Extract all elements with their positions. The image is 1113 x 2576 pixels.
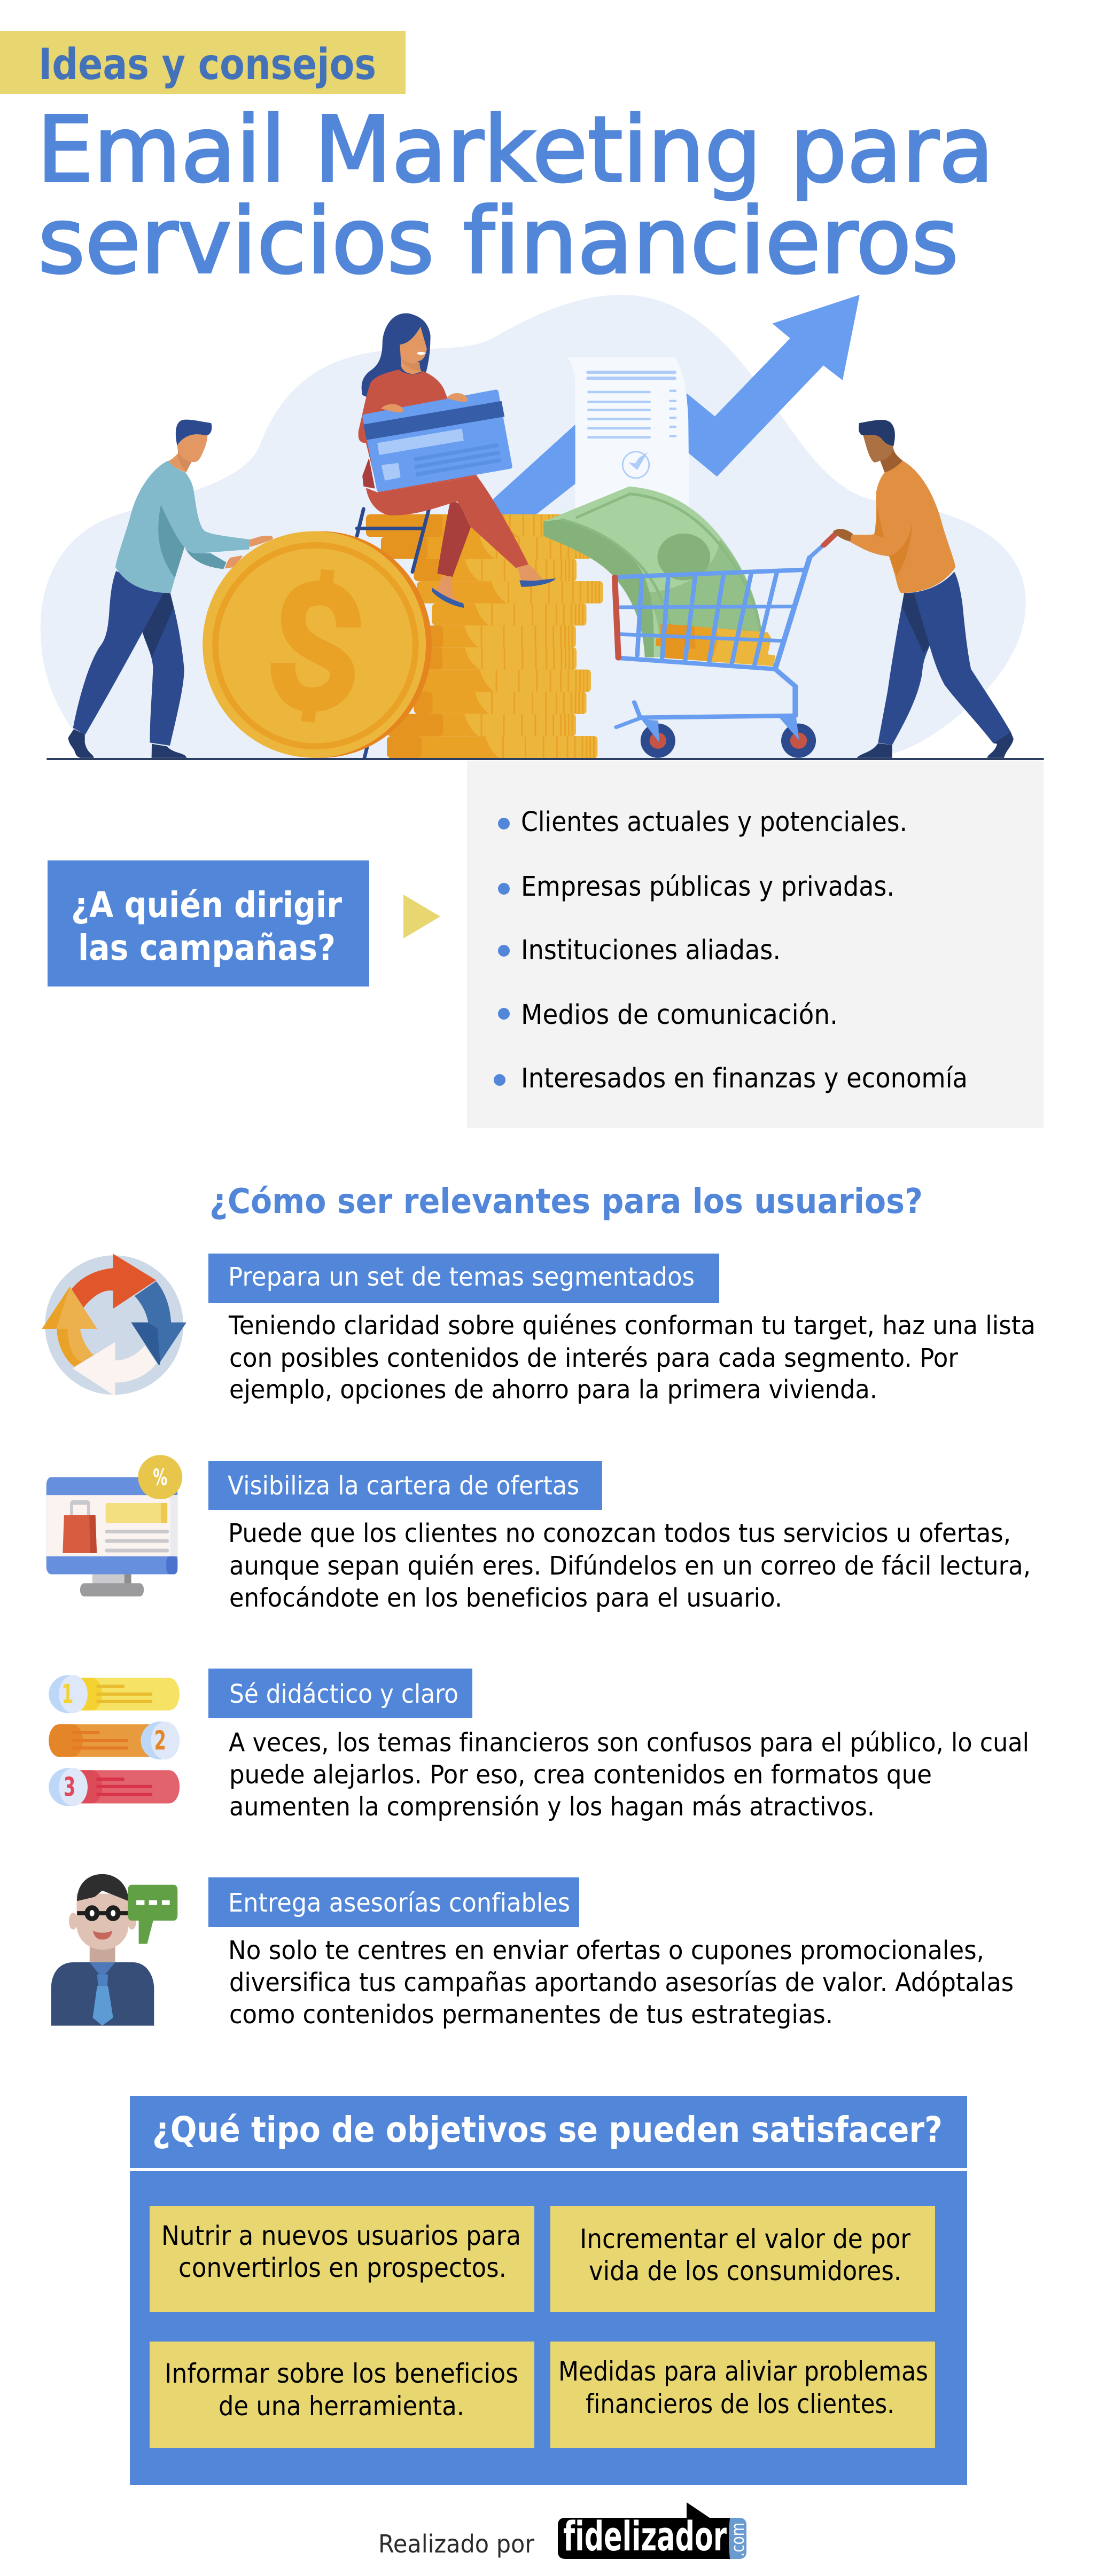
panel: tip 4 — [208, 1877, 1014, 2030]
list items — [494, 807, 968, 1094]
icon: monitor with offer: % — [153, 1466, 167, 1491]
objective card 3 — [150, 2342, 534, 2448]
cart frame — [616, 544, 824, 727]
big dollar coin — [203, 531, 432, 758]
panel: tip 3 — [208, 1669, 1029, 1822]
icon: monitor with offer — [46, 1455, 182, 1596]
banner: Ideas y consejos — [0, 31, 406, 94]
objective card 3: de una herramienta. — [219, 2391, 464, 2422]
panel: tip 2 — [208, 1461, 1031, 1613]
body text: aunque sepan quién eres. Difúndelos en un correo de fácil lectura, — [229, 1551, 1031, 1581]
callout: a quién dirigir: las campañas? — [78, 927, 336, 968]
title: servicios financieros — [38, 189, 959, 294]
objective card 1 — [150, 2206, 534, 2312]
panel: tip 1: Prepara un set de temas segmentados — [228, 1262, 695, 1292]
background blob — [41, 295, 1026, 758]
icon: numbered steps: 3 — [64, 1771, 75, 1803]
objectives heading — [130, 2096, 967, 2168]
title: Email Marketing para — [37, 97, 994, 203]
banknote — [543, 487, 762, 657]
callout: a quién dirigir — [48, 860, 369, 986]
objective card 4 — [550, 2342, 935, 2448]
panel: tip 2: Visibiliza la cartera de ofertas — [228, 1471, 579, 1501]
icon: numbered steps: 2 — [154, 1725, 166, 1756]
list items: Empresas públicas y privadas. — [521, 871, 894, 903]
title — [37, 97, 994, 294]
hero illustration — [41, 295, 1044, 760]
body text — [228, 1518, 1031, 1613]
coin stack — [357, 509, 603, 758]
chair — [357, 509, 429, 758]
credit card — [363, 392, 510, 489]
panel: audience list — [467, 761, 1044, 1128]
callout: a quién dirigir: ¿A quién dirigir — [71, 884, 342, 926]
panel: tip 3: Sé didáctico y claro — [229, 1679, 458, 1709]
objective card 1: Nutrir a nuevos usuarios para — [161, 2220, 521, 2251]
panel: tip 4: Entrega asesorías confiables — [228, 1888, 570, 1918]
icon: numbered steps — [49, 1675, 180, 1806]
section heading: ¿Cómo ser relevantes para los usuarios? — [209, 1182, 923, 1222]
body text: aumenten la comprensión y los hagan más atractivos. — [229, 1792, 875, 1822]
body text — [229, 1728, 1029, 1822]
wheels — [641, 724, 816, 758]
body text: A veces, los temas financieros son confusos para el público, lo cual — [229, 1728, 1029, 1758]
person: man with cart — [833, 420, 1014, 758]
body text: No solo te centres en enviar ofertas o cupones promocionales, — [228, 1936, 984, 1966]
objective card 2: vida de los consumidores. — [589, 2256, 901, 2287]
arrow: yellow triangle — [403, 895, 440, 938]
person: woman sitting with credit card — [359, 313, 556, 608]
logo: fidelizador.com — [558, 2502, 748, 2560]
body text — [228, 1311, 1036, 1405]
credit: Realizado por: Realizado por — [378, 2530, 534, 2558]
body text: ejemplo, opciones de ahorro para la primera vivienda. — [229, 1375, 877, 1405]
list items: Interesados en finanzas y economía — [521, 1063, 968, 1094]
objective card 2 — [550, 2206, 935, 2312]
body text: puede alejarlos. Por eso, crea contenidos en formatos que — [229, 1760, 932, 1790]
logo: fidelizador.com: .com — [727, 2523, 748, 2557]
objective card 3: Informar sobre los beneficios — [165, 2358, 518, 2389]
icon: circular arrows — [42, 1254, 186, 1396]
objectives heading: ¿Qué tipo de objetivos se pueden satisfacer? — [152, 2109, 943, 2150]
banner: Ideas y consejos: Ideas y consejos — [38, 40, 376, 89]
body text: Teniendo claridad sobre quiénes conforman tu target, haz una lista — [228, 1311, 1036, 1341]
body text: Puede que los clientes no conozcan todos tus servicios u ofertas, — [228, 1518, 1011, 1548]
logo: fidelizador.com: fidelizador — [563, 2512, 727, 2560]
coins in cart — [656, 624, 775, 666]
growth arrow — [493, 295, 860, 515]
objective card 4: financieros de los clientes. — [586, 2389, 894, 2420]
person: man pushing coin — [68, 420, 273, 758]
body text: enfocándote en los beneficios para el usuario. — [229, 1583, 782, 1613]
panel: tip 1 — [208, 1254, 1036, 1405]
list items: Medios de comunicación. — [521, 999, 838, 1031]
list items: Instituciones aliadas. — [521, 935, 781, 966]
body text: como contenidos permanentes de tus estrategias. — [229, 2000, 833, 2030]
panel: objectives — [130, 2096, 967, 2485]
objective card 2: Incrementar el valor de por — [580, 2223, 910, 2254]
body text: con posibles contenidos de interés para cada segmento. Por — [229, 1343, 958, 1373]
receipt — [567, 357, 689, 509]
objective card 4: Medidas para aliviar problemas — [558, 2356, 928, 2387]
list items: Clientes actuales y potenciales. — [521, 807, 907, 838]
icon: advisor with speech bubble — [51, 1874, 177, 2026]
shopping cart and person — [615, 420, 1014, 758]
ground line — [46, 758, 1044, 760]
body text — [228, 1936, 1014, 2030]
body text: diversifica tus campañas aportando asesorías de valor. Adóptalas — [229, 1968, 1014, 1998]
objective card 1: convertirlos en prospectos. — [178, 2252, 507, 2283]
icon: numbered steps: 1 — [61, 1678, 73, 1710]
